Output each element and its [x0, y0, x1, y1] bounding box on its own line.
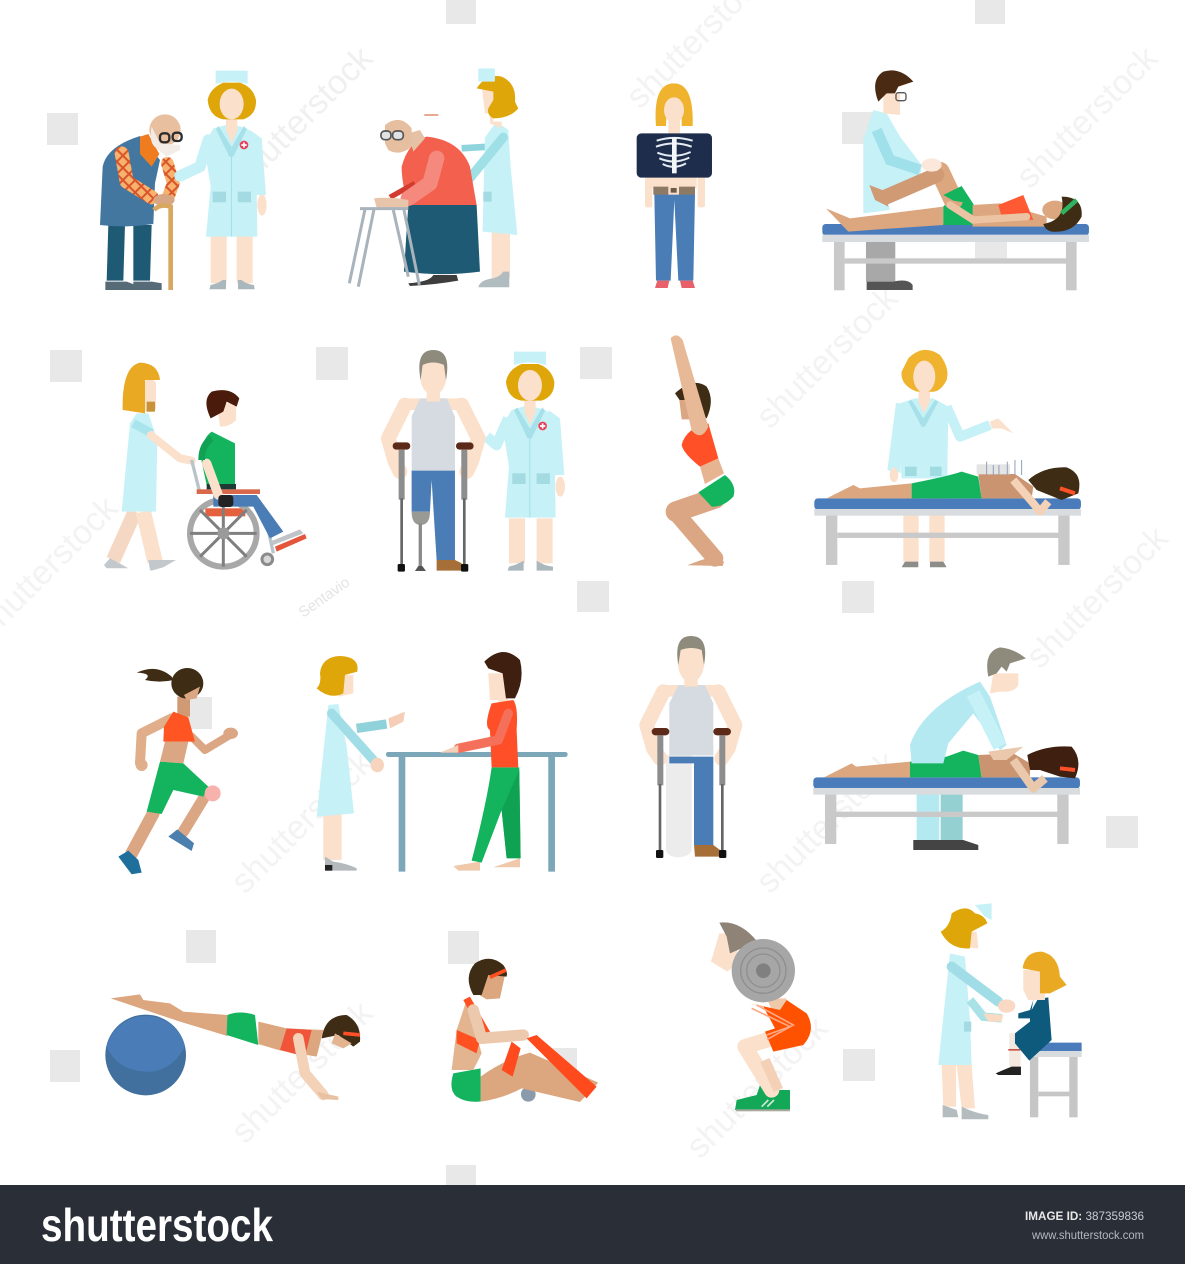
watermark layer: shutterstock: [1019, 518, 1176, 676]
doctor: [863, 70, 922, 213]
row 2: acupuncture doctor with patient on table: [814, 350, 1081, 567]
watermark layer: shutterstock: [224, 38, 381, 196]
row 4: nurse examining seated child: [938, 903, 1082, 1119]
exercise ball: [105, 1015, 186, 1095]
parallel bars: [386, 752, 568, 872]
nurse: [180, 71, 267, 289]
row 3: nurse guiding woman at parallel bars: [317, 652, 568, 872]
massage table: [814, 498, 1081, 565]
old man: [100, 114, 182, 290]
woman: [111, 994, 360, 1100]
patient: [374, 120, 480, 286]
row 1: woman with x-ray: [637, 83, 712, 288]
wheelchair: [190, 460, 273, 567]
massage table: [822, 224, 1089, 290]
row 3: doctor massaging patient's back: [813, 647, 1080, 850]
woman: [645, 83, 705, 288]
row 4: weightlifter squatting with barbell: [711, 922, 811, 1111]
row 4: woman stretching leg with elastic band: [451, 959, 598, 1102]
doctor legs: [866, 240, 913, 290]
watermark layer: shutterstock: [1009, 38, 1166, 196]
patient: [824, 746, 1078, 788]
row 1: doctor bending patient's knee on table: [822, 70, 1089, 290]
watermark layer: shutterstock: [679, 1008, 836, 1166]
nurse: [487, 352, 565, 571]
row 3: runner with injured knee: [118, 668, 238, 874]
watermark layer: shutterstock: [749, 278, 906, 436]
stool: [1030, 1043, 1082, 1117]
watermark layer: Sentavio: [296, 574, 353, 621]
shutterstock logo: shutterstock: [41, 1199, 273, 1251]
doctor legs: [913, 793, 978, 850]
nurse behind patient: [451, 68, 518, 287]
row 3: man with leg cast on crutches: [647, 636, 735, 858]
image id: IMAGE ID: 387359836: [1025, 1209, 1144, 1223]
child: [996, 952, 1067, 1075]
watermark layer: shutterstock: [224, 993, 381, 1151]
watermark layer: shutterstock: [224, 743, 381, 901]
doctor: [910, 647, 1026, 763]
row 1: patient with walker and nurse: [349, 68, 518, 287]
row 2: nurse pushing boy in wheelchair: [104, 363, 307, 571]
woman: [440, 652, 522, 871]
nurse: [104, 363, 192, 571]
doctor: [890, 350, 1013, 567]
boy: [201, 390, 307, 552]
row 4: woman plank on exercise ball: [105, 994, 360, 1100]
dash mark: [424, 112, 438, 117]
row 2: woman squatting with arms raised: [671, 335, 734, 566]
x-ray panel: [637, 133, 712, 178]
massage table: [813, 777, 1080, 844]
footer bar: [0, 1185, 1185, 1264]
crutches: [393, 442, 474, 572]
website: www.shutterstock.com: [1031, 1228, 1144, 1242]
watermark layer: shutterstock: [749, 743, 906, 901]
patient with needles: [827, 460, 1079, 512]
patient: [826, 158, 1082, 232]
walker: [349, 209, 419, 287]
man: [388, 350, 478, 571]
row 2: man with crutches and prosthetic leg beside nurse: [388, 350, 565, 572]
crutches: [652, 728, 731, 858]
nurse: [317, 656, 405, 871]
row 1: old man with cane and nurse: [100, 71, 267, 290]
nurse: [938, 903, 1015, 1119]
